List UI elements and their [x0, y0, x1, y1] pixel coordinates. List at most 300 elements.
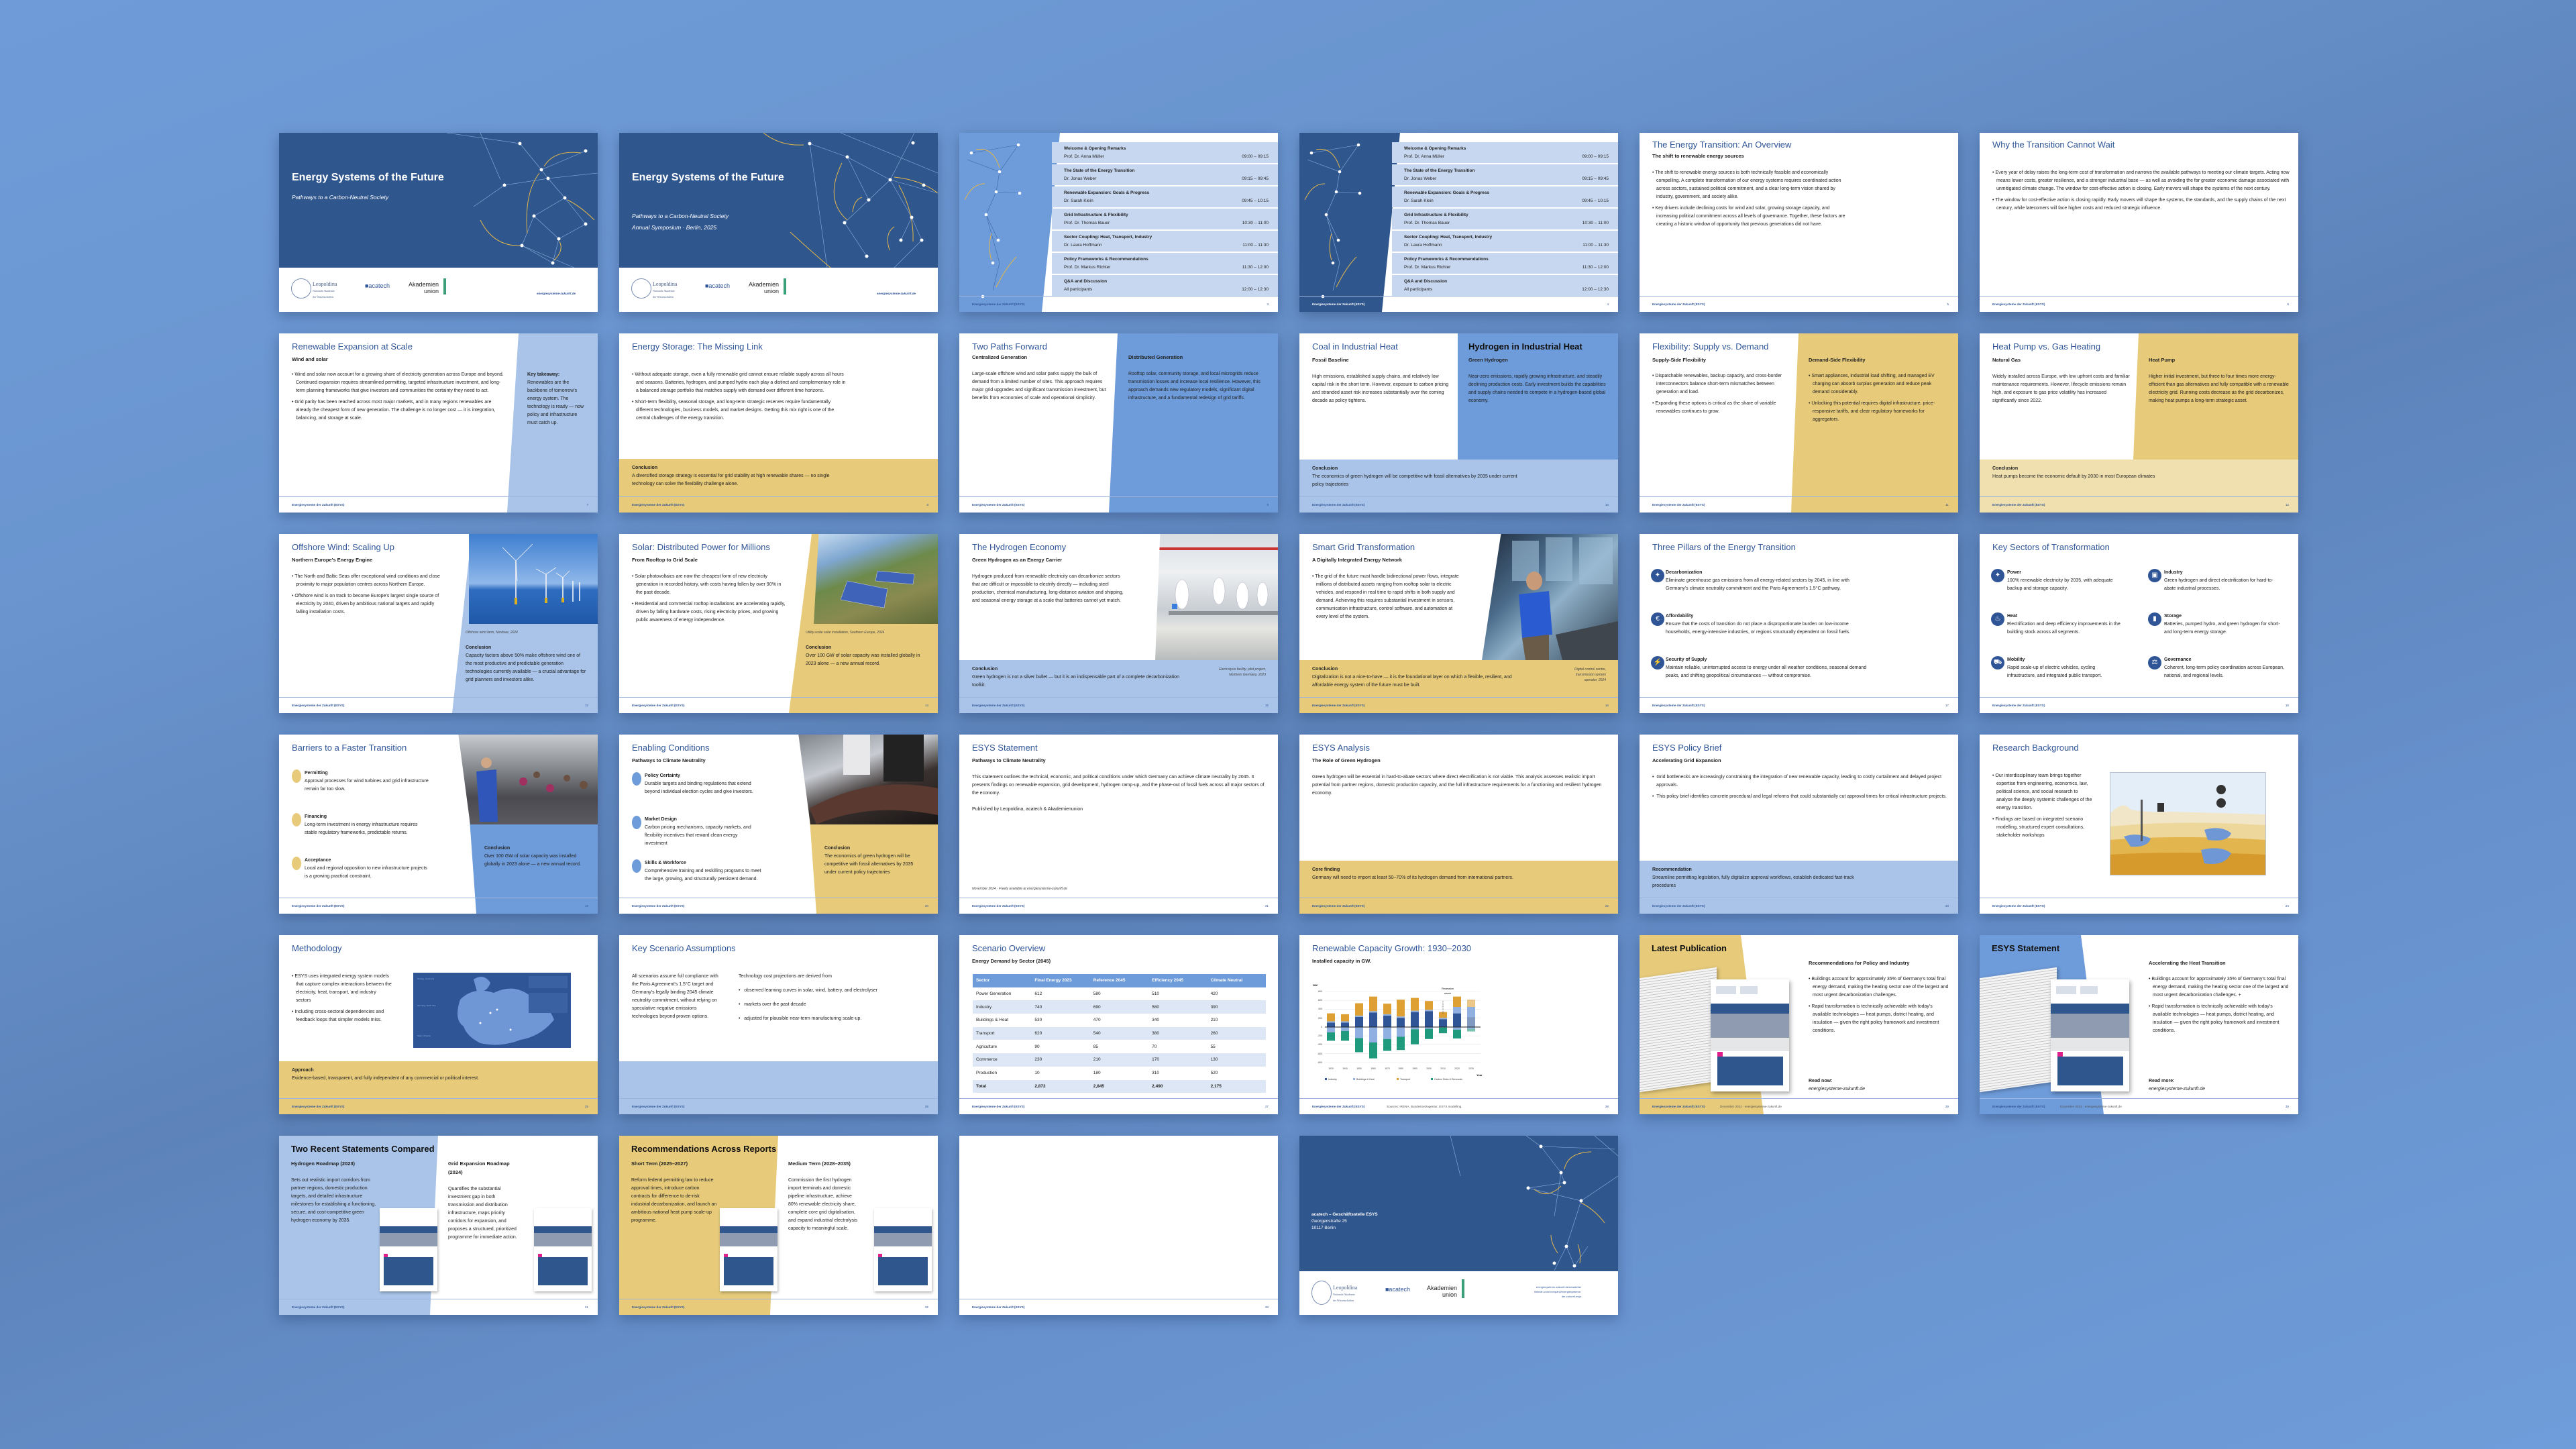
agenda list: [1392, 142, 1618, 296]
heading: Renewable Expansion at Scale: [292, 341, 413, 352]
contact address: acatech – Geschäftsstelle ESYS: [1311, 1212, 1378, 1217]
logos row: energiesysteme-zukunft.de: [877, 292, 916, 295]
pillar: affordability: Affordability: [1666, 614, 1693, 619]
sector: governance: [2148, 656, 2296, 690]
stacked bar chart: 2010: [1440, 1067, 1446, 1070]
right column: Green Hydrogen: [1468, 357, 1508, 363]
footer: Energiesysteme der Zukunft (ESYS): [972, 1305, 1024, 1309]
data table: 2,845: [1093, 1084, 1104, 1089]
conclusion band: [619, 459, 938, 513]
read now link: energiesysteme-zukunft.de: [1809, 1087, 1865, 1091]
bullet text: • Our interdisciplinary team brings together expertise from engineering, economics, law, political science, and social research to analyse the deeply systemic challenges of the energy transition.: [1992, 773, 2092, 810]
data table: Industry: [976, 1005, 991, 1010]
heading: Heat Pump vs. Gas Heating: [1992, 341, 2100, 352]
body text: Hydrogen produced from renewable electricity can decarbonize sectors that are difficult or impossible to electrify directly — including steel production, chemical manufacturing, long-distance aviation and shipping, and seasonal energy storage at a scale that batteries cannot yet match.: [972, 574, 1124, 603]
agenda list: 09:00 – 09:15: [1242, 154, 1269, 159]
conclusion band: Heat pumps become the economic default by 2030 in most European climates: [1992, 474, 2155, 479]
read more link: [2149, 1077, 2283, 1093]
right blue column: [1458, 333, 1618, 460]
slide 24: research background: [1980, 735, 2298, 914]
slide 14: solar: [619, 534, 938, 713]
bullet text: • The North and Baltic Seas offer exceptional wind conditions and close proximity to major population centres across Northern Europe.: [292, 574, 440, 587]
data table: 2,175: [1211, 1084, 1222, 1089]
stacked bar chart: Buildings & Heat: [1356, 1078, 1375, 1081]
slide 7: renewable expansion: [279, 333, 598, 513]
agenda list: Dr. Sarah Klein: [1404, 199, 1434, 203]
approach band: Approach: [292, 1068, 314, 1073]
barrier: financing: [292, 813, 446, 847]
sector: power: [1991, 569, 2139, 602]
publication text: • Rapid transformation is technically achievable with today's available technologies — heat pumps, district heating, and insulation — given the right policy framework and investment conditions.: [1809, 1004, 1939, 1033]
agenda list: Welcome & Opening Remarks: [1064, 146, 1126, 151]
footer: Energiesysteme der Zukunft (ESYS): [292, 704, 344, 707]
footer: Energiesysteme der Zukunft (ESYS): [1312, 704, 1364, 707]
footer: [1640, 898, 1958, 914]
agenda list: 09:45 – 10:15: [1242, 199, 1269, 203]
body text: This statement outlines the technical, economic, and political conditions under which Germany can achieve climate neutrality by 2045. It presents findings on renewable expansion, grid development, hydrogen ramp-up, and the phase-out of fossil fuels across all major sectors of the economy.: [972, 775, 1264, 796]
agenda list: 09:15 – 09:45: [1582, 176, 1609, 181]
bullet text: • Key drivers include declining costs for wind and solar, growing storage capacity, and increasing political commitment across all levels of governance. Together, these factors are creating a historic window of opportunity that previous generations did not have.: [1652, 206, 1845, 227]
logos row: union: [1442, 1291, 1457, 1298]
footer: [1640, 1098, 1958, 1115]
contact address: 10117 Berlin: [1311, 1226, 1336, 1230]
slide 10: coal vs hydrogen in industrial heat: [1299, 333, 1618, 513]
right column: Demand-Side Flexibility: [1809, 357, 1866, 363]
left text: All scenarios assume full compliance with the Paris Agreement's 1.5°C target and Germany's legally binding 2045 climate neutrality commitment, without relying on speculative negative emissions technologies beyond proven options.: [632, 974, 718, 1019]
subheading: Installed capacity in GW.: [1312, 958, 1371, 964]
footer: [619, 697, 938, 714]
sector: storage: ▮: [2153, 615, 2157, 623]
footer: 13: [585, 704, 588, 707]
left column: [972, 354, 1106, 400]
stacked bar chart: Carbon Sinks & Removals: [1434, 1078, 1462, 1081]
conclusion band: Electrolysis facility, pilot project,: [1219, 667, 1266, 672]
footer: [959, 697, 1278, 714]
conclusion text: Capacity factors above 50% make offshore wind one of the most productive and predictable generation technologies currently available — a crucial advantage for grid planners and investors alike.: [466, 653, 586, 682]
pillar: decarbonization: ✦: [1655, 572, 1660, 579]
bullet text: • Offshore wind is on track to become Europe's largest single source of electricity by 2040, driven by ambitious national targets and rapidly falling installation costs.: [292, 594, 439, 614]
data table: 520: [1211, 1071, 1218, 1075]
heading: Key Scenario Assumptions: [632, 943, 736, 953]
footer: Energiesysteme der Zukunft (ESYS): [1312, 303, 1364, 306]
footer: [1299, 1098, 1618, 1115]
right statement text: [448, 1160, 522, 1242]
heading: Recommendations Across Reports: [631, 1144, 776, 1154]
bullet text: • This policy brief identifies concrete procedural and legal reforms that could substantially cut approval times for critical infrastructure projects.: [1652, 794, 1947, 799]
medium term text: [788, 1160, 862, 1233]
footer: 33: [1265, 1305, 1269, 1309]
logos row: Akademien: [1427, 1285, 1457, 1291]
footer: [619, 898, 938, 914]
conclusion band: Conclusion: [1312, 667, 1338, 672]
footer: 8: [926, 503, 928, 506]
heading: Two Paths Forward: [972, 341, 1047, 352]
footer: [279, 898, 598, 914]
bullet text: [1652, 170, 1845, 227]
cover title: Energy Systems of the Future: [292, 172, 444, 183]
logos row: Nationale Akademie: [1333, 1293, 1355, 1296]
footer: 19: [585, 904, 588, 908]
left column: [1652, 356, 1790, 419]
sector: power: ✦: [1995, 572, 2000, 579]
condition: policy certainty: Policy Certainty: [645, 773, 680, 778]
footer: 23: [1945, 904, 1949, 908]
data table: 10: [1034, 1071, 1040, 1075]
barrier: permitting: Permitting: [305, 771, 328, 775]
pillar: security of supply: [1651, 656, 1946, 690]
conclusion side panel: [789, 534, 938, 713]
sector: mobility: [1991, 656, 2139, 690]
footer: Energiesysteme der Zukunft (ESYS): [632, 704, 684, 707]
stacked bar chart: 1930: [1328, 1067, 1334, 1070]
footer: [1640, 697, 1958, 714]
short term text: Reform federal permitting law to reduce approval times, introduce carbon contracts for difference to de-risk industrial decarbonization, and launch an ambitious national heat pump scale-up programme.: [631, 1178, 716, 1223]
right column: • Smart appliances, industrial load shifting, and managed EV charging can absorb surplus generation and reduce peak demand considerably.: [1809, 374, 1935, 394]
publication text: Recommendations for Policy and Industry: [1809, 960, 1909, 966]
slide 22: ESYS analysis: [1299, 735, 1618, 914]
slide 27: scenario overview table: [959, 935, 1278, 1114]
slide 3: agenda (light panel): [959, 133, 1278, 312]
footer: 32: [925, 1305, 928, 1309]
left column: [1992, 356, 2130, 405]
left column: Large-scale offshore wind and solar parks supply the bulk of demand from a limited number of sites. This approach requires major grid upgrades and significant transmission investment, but benefits from economies of scale and operational simplicity.: [972, 372, 1106, 400]
conclusion band: [959, 660, 1278, 713]
footer: 9: [1267, 503, 1269, 506]
footer: Energiesysteme der Zukunft (ESYS): [632, 904, 684, 908]
footer: Energiesysteme der Zukunft (ESYS): [1312, 904, 1364, 908]
sector: heat: Electrification and deep efficiency improvements in the building stock across all segments.: [2007, 622, 2121, 635]
stacked bar chart: 1960: [1371, 1067, 1376, 1070]
footer: Energiesysteme der Zukunft (ESYS): [1992, 904, 2045, 908]
heading: Smart Grid Transformation: [1312, 542, 1415, 552]
read now link: Read now:: [1809, 1079, 1832, 1083]
statement text: Accelerating the Heat Transition: [2149, 960, 2226, 966]
sector: storage: [2148, 612, 2296, 646]
right bullet text: • observed learning curves in solar, wind, battery, and electrolyser: [739, 988, 877, 993]
sector: industry: Green hydrogen and direct electrification for hard-to-abate industrial processes.: [2164, 578, 2273, 591]
right column: Distributed Generation: [1128, 354, 1183, 360]
map of Europe: [413, 973, 571, 1048]
data table: Total: [976, 1084, 986, 1089]
data table: 310: [1152, 1071, 1159, 1075]
footer: Energiesysteme der Zukunft (ESYS): [1992, 303, 2045, 306]
agenda list: All participants: [1064, 287, 1092, 292]
data table: 55: [1211, 1044, 1216, 1049]
heading: Renewable Capacity Growth: 1930–2030: [1312, 943, 1471, 953]
heading: Two Recent Statements Compared: [291, 1144, 435, 1154]
logos row: der Wissenschaften: [653, 295, 674, 299]
footer: Energiesysteme der Zukunft (ESYS): [632, 1105, 684, 1108]
footer: [1980, 697, 2298, 714]
conclusion band: operator, 2024: [1585, 678, 1606, 682]
agenda list: Prof. Dr. Thomas Bauer: [1064, 221, 1110, 225]
barrier: permitting: [292, 769, 446, 803]
conclusion band: Digitalization is not a nice-to-have — it is the foundational layer on which a flexible, resilient, and affordable energy system of the future must be built.: [1312, 675, 1512, 688]
bullet text: • The grid of the future must handle bidirectional power flows, integrate millions of distributed assets ranging from rooftop solar to electric vehicles, and respond in real time to rapid shifts in both supply and demand. Achieving this requires substantial investment in sensors, communication infrastructure, control software, and automation at every level of the system.: [1312, 574, 1459, 619]
sector: governance: Coherent, long-term policy coordination across European, national, and regional levels.: [2164, 665, 2284, 678]
sector: mobility: Mobility: [2007, 657, 2025, 662]
left column: Natural Gas: [1992, 357, 2021, 363]
slide 25: methodology: [279, 935, 598, 1114]
data table: 2,490: [1152, 1084, 1163, 1089]
conclusion band: Green hydrogen is not a silver bullet — but it is an indispensable part of a complete decarbonization toolkit.: [972, 675, 1179, 688]
condition: market design: [632, 816, 786, 849]
bullet text: • Findings are based on integrated scenario modelling, structured expert consultations, stakeholder workshops: [1992, 817, 2084, 838]
brochure thumbnail 2: [534, 1208, 592, 1291]
statement text: • Rapid transformation is technically achievable with today's available technologies — heat pumps, district heating, and insulation — given the right policy framework and investment conditions.: [2149, 1004, 2279, 1033]
sector: industry: [2148, 569, 2296, 602]
footer: [279, 1098, 598, 1115]
data table: Climate Neutral: [1211, 978, 1242, 983]
agenda list: Welcome & Opening Remarks: [1404, 146, 1466, 151]
conclusion band: [1299, 660, 1618, 713]
photo: laboratory: [1155, 534, 1278, 660]
right bullet text: [739, 973, 926, 1026]
agenda list: Dr. Sarah Klein: [1064, 199, 1093, 203]
key takeaway panel: [507, 333, 598, 513]
barrier: financing: Financing: [305, 814, 327, 819]
photo: solar panels on hillside: [814, 534, 938, 624]
footer: Energiesysteme der Zukunft (ESYS): [292, 1105, 344, 1108]
statement text: • Buildings account for approximately 35% of Germany's total final energy demand, making the heating sector one of the largest and most urgent decarbonization challenges. +: [2149, 977, 2288, 998]
agenda list: 11:30 – 12:00: [1582, 265, 1609, 270]
data table: Buildings & Heat: [976, 1018, 1008, 1022]
right column: • Unlocking this potential requires digital infrastructure, price-responsive tariffs, and clear regulatory frameworks for aggregators.: [1809, 401, 1935, 422]
key takeaway text: Renewables are the backbone of tomorrow's energy system. The technology is ready — now policy and infrastructure must catch up.: [527, 380, 584, 425]
stacked bar chart: 1980: [1398, 1067, 1403, 1070]
pillar: affordability: Ensure that the costs of transition do not place a disproportionate burden on low-income households, energy-intensive industries, or regions structurally dependent on fossil fuels.: [1666, 622, 1850, 635]
footer: 24: [2286, 904, 2289, 908]
footer: [1299, 697, 1618, 714]
agenda list: Renewable Expansion: Goals & Progress: [1064, 191, 1149, 195]
stacked bar chart: 2000: [1426, 1067, 1432, 1070]
data table: Production: [976, 1071, 997, 1075]
footer: [279, 697, 598, 714]
subheading: Wind and solar: [292, 356, 328, 362]
agenda list: Prof. Dr. Anna Müller: [1404, 154, 1444, 159]
conclusion text: Over 100 GW of solar capacity was installed globally in 2023 alone — a new annual record.: [806, 653, 920, 666]
heading right: Hydrogen in Industrial Heat: [1468, 341, 1582, 352]
caption: Offshore wind farm, Nordsee, 2024: [466, 631, 518, 635]
bullet text: [292, 973, 392, 1028]
conclusion text: Conclusion: [806, 645, 831, 650]
bullet text: [632, 372, 845, 421]
footer: 30: [2286, 1105, 2289, 1108]
footer: Energiesysteme der Zukunft (ESYS): [972, 303, 1024, 306]
footer: [1299, 296, 1618, 313]
pillar: security of supply: ⚡: [1654, 659, 1662, 666]
read now link: [1809, 1077, 1943, 1093]
footer: Energiesysteme der Zukunft (ESYS): [1652, 904, 1705, 908]
stacked bar chart: -400: [1318, 1043, 1322, 1046]
footer: 12: [2286, 503, 2289, 506]
right column: Rooftop solar, community storage, and local microgrids reduce transmission losses and increase local resilience. However, this approach demands new regulatory models, significant digital infrastructure, and a fundamental redesign of grid tariffs.: [1128, 372, 1260, 400]
slide 20: enabling conditions: [619, 735, 938, 914]
agenda list: 09:00 – 09:15: [1582, 154, 1609, 159]
network side panel: [959, 133, 1060, 312]
data table: 470: [1093, 1018, 1101, 1022]
stacked bar chart: shock: [1444, 992, 1451, 995]
bullet text: [632, 573, 786, 628]
left column: Fossil Baseline: [1312, 357, 1349, 363]
footer: Energiesysteme der Zukunft (ESYS): [1992, 1105, 2045, 1108]
slide 9: two paths forward: [959, 333, 1278, 513]
footer: [1299, 496, 1618, 513]
footer: [1640, 296, 1958, 313]
footer: 25: [585, 1105, 588, 1108]
footer: [1980, 898, 2298, 914]
bullet text: • Grid parity has been reached across most major markets, and in many regions renewables are already the cheapest form of new generation. The challenge is no longer cost — it is integration, balancing, and storage at scale.: [292, 400, 495, 421]
heading: ESYS Statement: [972, 743, 1038, 753]
stacked bar chart: 1950: [1356, 1067, 1362, 1070]
body text: Green hydrogen will be essential in hard-to-abate sectors where direct electrification is not viable. This analysis assesses realistic import potential from partner regions, domestic production capacity, and the full infrastructure requirements for a functioning and resilient hydrogen economy.: [1312, 775, 1601, 796]
conclusion text: [824, 845, 925, 877]
bullet text: • Residential and commercial rooftop installations are accelerating rapidly, driven by falling hardware costs, rising electricity prices, and growing public awareness of energy independence.: [632, 602, 785, 623]
conclusion band: The economics of green hydrogen will be competitive with fossil alternatives by 2035 under current policy trajectories: [1312, 474, 1517, 487]
logos row: ■acatech: [1385, 1286, 1410, 1293]
agenda list: Prof. Dr. Markus Richter: [1404, 265, 1450, 270]
stacked bar chart: -200: [1318, 1034, 1322, 1037]
data table: 210: [1211, 1018, 1218, 1022]
slide 31: two recent statements compared: [279, 1136, 598, 1315]
conclusion text: Conclusion: [466, 645, 491, 650]
slide 6: why the transition cannot wait: [1980, 133, 2298, 312]
map of Europe: Germany, North Sea: [417, 1004, 436, 1007]
data table: 340: [1152, 1018, 1159, 1022]
footer: 31: [585, 1305, 588, 1309]
open book and brochure: [1640, 965, 1790, 1092]
agenda list: 11:30 – 12:00: [1242, 265, 1269, 270]
footer: 28: [1605, 1105, 1609, 1108]
data table: [973, 974, 1266, 1093]
heading left: Coal in Industrial Heat: [1312, 341, 1398, 352]
agenda list: The State of the Energy Transition: [1404, 168, 1474, 173]
footer: 18: [2286, 704, 2289, 707]
bullet text: [1992, 170, 2290, 211]
subheading: Pathways to Climate Neutrality: [632, 757, 706, 763]
left column: Supply-Side Flexibility: [1652, 357, 1706, 363]
yellow side stripe: [1640, 935, 1958, 1114]
footer: [959, 296, 1278, 313]
logos row: der Wissenschaften: [313, 295, 333, 299]
heading: Three Pillars of the Energy Transition: [1652, 542, 1796, 552]
footer: 22: [1605, 904, 1609, 908]
subheading: From Rooftop to Grid Scale: [632, 557, 698, 563]
agenda list: Grid Infrastructure & Flexibility: [1404, 213, 1468, 217]
bullet text: • The shift to renewable energy sources is both technically feasible and economically compelling. A complete transformation of our energy systems requires coordinated action across sectors, sustained political commitment, and a clear long-term vision shared by industry, government, and society alike.: [1652, 170, 1841, 199]
logos row: Leopoldina: [653, 281, 677, 287]
footer: [1640, 496, 1958, 513]
map of Europe: Norway, Jærstrand: [417, 977, 434, 980]
agenda list: 12:00 – 12:30: [1242, 287, 1269, 292]
logos row: union: [424, 288, 439, 294]
logos row: der-zukunft-esys: [1562, 1295, 1581, 1298]
footer: Energiesysteme der Zukunft (ESYS): [1312, 503, 1364, 506]
pillar: decarbonization: Decarbonization: [1666, 570, 1702, 575]
data table: 130: [1211, 1057, 1218, 1062]
photo: wind farm: [469, 534, 598, 624]
footer: 3: [1267, 303, 1269, 306]
right column: Heat Pump: [2149, 357, 2175, 363]
footer: [619, 496, 938, 513]
brochure thumbnail 1: [380, 1208, 437, 1291]
slide 12: heat pump vs gas: [1980, 333, 2298, 513]
heading: Barriers to a Faster Transition: [292, 743, 407, 753]
footer: [1980, 1098, 2298, 1115]
stacked bar chart: 1940: [1342, 1067, 1348, 1070]
left statement text: Hydrogen Roadmap (2023): [291, 1161, 355, 1167]
footer: 27: [1265, 1105, 1269, 1108]
heading: ESYS Analysis: [1312, 743, 1370, 753]
data table: 420: [1211, 991, 1218, 996]
bullet text: • Including cross-sectoral dependencies and feedback loops that simpler models miss.: [292, 1010, 384, 1022]
bullet text: [1652, 773, 1947, 804]
slide 30: ESYS statement heat transition: [1980, 935, 2298, 1114]
footer: [619, 1299, 938, 1316]
data table: 510: [1152, 991, 1159, 996]
data table: 70: [1152, 1044, 1157, 1049]
footer: [959, 496, 1278, 513]
stacked bar chart: Industry: [1328, 1078, 1337, 1081]
footer: [959, 898, 1278, 914]
sector: power: Power: [2007, 570, 2021, 575]
heading: Solar: Distributed Power for Millions: [632, 542, 770, 552]
agenda list: Dr. Jonas Weber: [1064, 176, 1096, 181]
agenda list: [1052, 142, 1278, 296]
sector: industry: ▣: [2151, 572, 2158, 579]
photo: meeting: [790, 735, 938, 824]
footer: Energiesysteme der Zukunft (ESYS): [1652, 1105, 1705, 1108]
agenda list: 11:00 – 11:30: [1582, 243, 1609, 248]
conclusion band: [1299, 460, 1618, 513]
logos row: [631, 278, 916, 299]
sector: industry: Industry: [2164, 570, 2183, 575]
subheading: Accelerating Grid Expansion: [1652, 757, 1721, 763]
right statement text: Quantifies the substantial investment gap in both transmission and distribution infrastructure, maps priority corridors for expansion, and proposes a structured, prioritized programme for immediate action.: [448, 1187, 517, 1240]
footer: 14: [925, 704, 928, 707]
condition: policy certainty: [632, 772, 786, 806]
footer: Energiesysteme der Zukunft (ESYS): [1652, 704, 1705, 707]
conclusion side panel: [279, 735, 598, 914]
agenda list: 10:30 – 11:00: [1582, 221, 1609, 225]
footer: 10: [1605, 503, 1609, 506]
left statement text: Sets out realistic import corridors from partner regions, domestic production targets, and detailed infrastructure milestones for establishing a functioning, secure, and cost-competitive green hydrogen economy by 2035.: [291, 1178, 376, 1223]
footer: 6: [2287, 303, 2289, 306]
condition: skills: Comprehensive training and reskilling programs to meet the large, growing, and structurally persistent demand.: [645, 869, 761, 881]
slide 29: latest publication: [1640, 935, 1958, 1114]
subheading: Northern Europe's Energy Engine: [292, 557, 372, 563]
footer: [279, 1299, 598, 1316]
slide 5: energy transition overview: [1640, 133, 1958, 312]
logos row: der Wissenschaften: [1333, 1299, 1354, 1302]
data table: 540: [1093, 1031, 1101, 1036]
heading: Energy Storage: The Missing Link: [632, 341, 763, 352]
heading: Methodology: [292, 943, 341, 953]
sector: mobility: ⛟: [1994, 659, 2002, 666]
heading: Research Background: [1992, 743, 2079, 753]
stacked bar chart: -800: [1318, 1061, 1322, 1064]
subheading: Energy Demand by Sector (2045): [972, 958, 1051, 964]
conclusion text: [806, 644, 926, 668]
footer: Energiesysteme der Zukunft (ESYS): [972, 1105, 1024, 1108]
subheading: The Role of Green Hydrogen: [1312, 757, 1381, 763]
yellow left column: [619, 1136, 938, 1315]
footer: Energiesysteme der Zukunft (ESYS): [292, 904, 344, 908]
conclusion text: The economics of green hydrogen will be competitive with fossil alternatives by 2035 under current policy trajectories: [824, 854, 913, 875]
logos row: energiesysteme-zukunft.de: [537, 292, 576, 295]
heading: Key Sectors of Transformation: [1992, 542, 2110, 552]
heading: ESYS Policy Brief: [1652, 743, 1721, 753]
